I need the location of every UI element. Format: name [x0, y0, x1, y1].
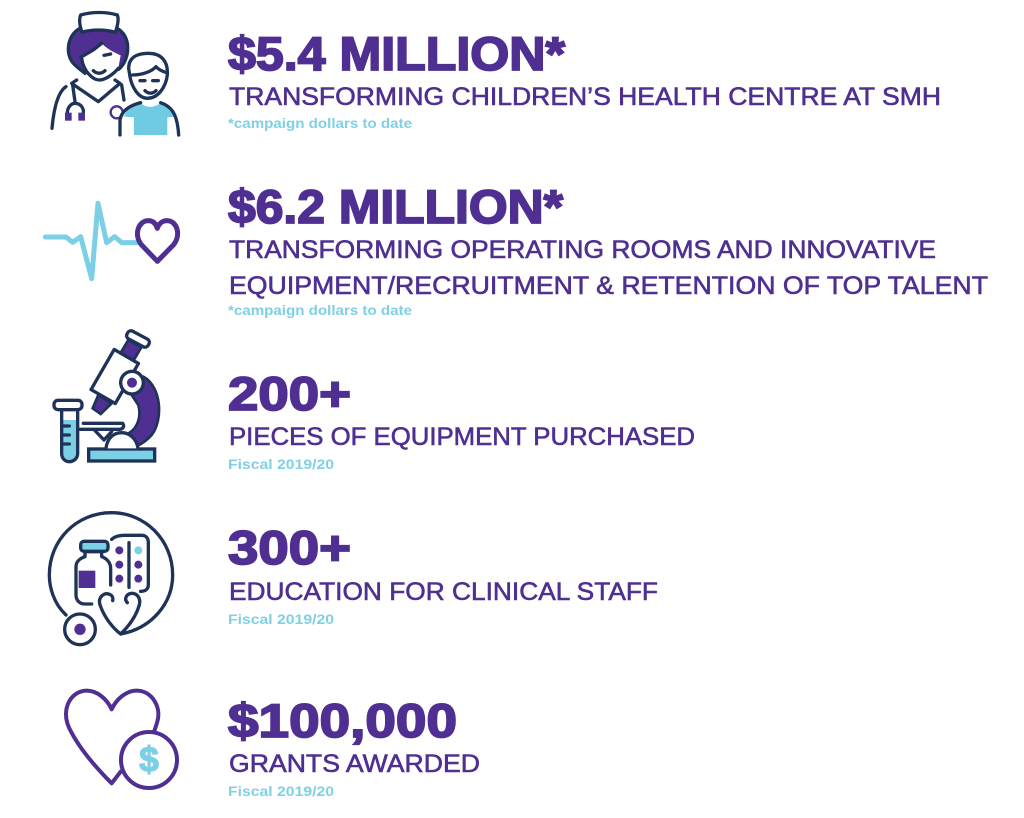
heading: 6.2 million: $6.2 MILLION* [228, 180, 564, 233]
subheading: equipment purchased: PIECES OF EQUIPMENT PURCHASED [229, 423, 695, 451]
note: fiscal year: Fiscal 2019/20 [228, 456, 334, 472]
subheading: grants awarded: GRANTS AWARDED [229, 750, 480, 778]
subheading: children's health centre: TRANSFORMING CHILDREN’S HEALTH CENTRE AT SMH [229, 83, 941, 111]
subheading: equipment recruitment: EQUIPMENT/RECRUITMENT & RETENTION OF TOP TALENT [229, 272, 988, 300]
heading: 300+: 300+ [228, 521, 351, 574]
note: campaign dollars: *campaign dollars to date [228, 302, 412, 318]
icon: medicine and stethoscope [49, 513, 173, 645]
icon: heartbeat and heart [45, 203, 178, 279]
subheading: operating rooms: TRANSFORMING OPERATING ROOMS AND INNOVATIVE [229, 236, 936, 264]
heading: 200+: 200+ [228, 367, 351, 420]
icon: heart with dollar [66, 691, 177, 788]
note: campaign dollars: *campaign dollars to date [228, 115, 412, 131]
subheading: clinical staff: EDUCATION FOR CLINICAL STAFF [229, 578, 658, 606]
note: fiscal year: Fiscal 2019/20 [228, 611, 334, 627]
icon: nurse and child [52, 12, 179, 135]
heading: 100,000: $100,000 [228, 694, 457, 747]
heading: 5.4 million: $5.4 MILLION* [228, 27, 566, 80]
icon: heart with dollar: $ [139, 741, 159, 780]
note: fiscal year: Fiscal 2019/20 [228, 783, 334, 799]
icon: microscope and test tube [54, 330, 159, 462]
